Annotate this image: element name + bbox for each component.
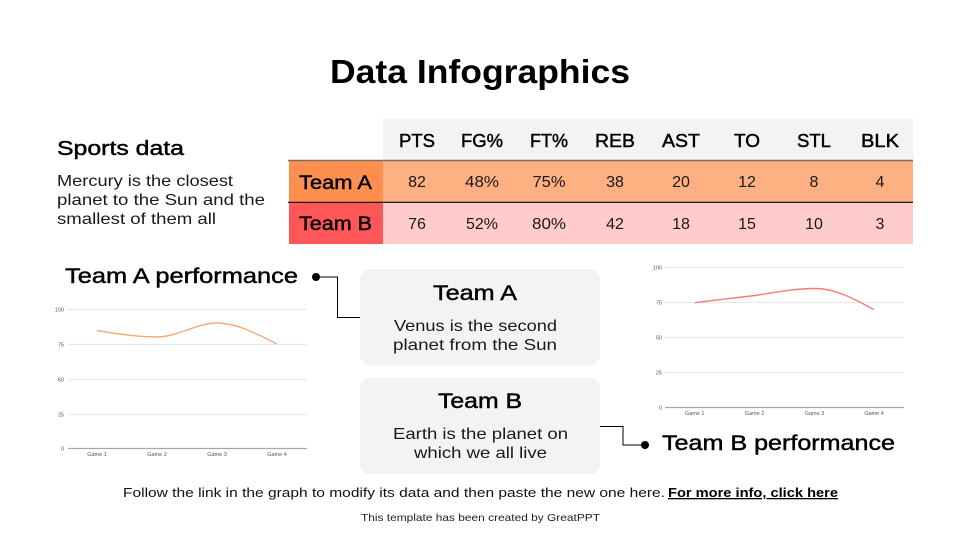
line chart: team B: 25 [656, 370, 662, 376]
line chart: team B: 75 [656, 300, 662, 306]
connector: team B [600, 426, 649, 449]
stats table: 48% [465, 174, 499, 191]
stats table: PTS [399, 131, 435, 151]
stats table: STL [797, 131, 831, 151]
text block: sports data: smallest of them all [57, 211, 216, 228]
stats table: 10 [805, 216, 823, 233]
card: team B [360, 378, 600, 474]
stats table: 82 [408, 174, 426, 191]
card: team B: Team B [438, 390, 522, 413]
line chart: team B: 0 [659, 406, 662, 412]
stats table: Team A [299, 173, 372, 194]
stats table: 80% [532, 216, 566, 233]
card: team A: Team A [433, 282, 517, 305]
stats table: 20 [672, 174, 690, 191]
title: Data Infographics [330, 53, 630, 90]
line chart: team B: Game 4 [864, 411, 884, 417]
footer note: For more info, click here [668, 485, 838, 500]
stats table: 3 [876, 216, 885, 233]
card: team A [360, 269, 600, 365]
footer note [123, 485, 838, 500]
stats table: 8 [810, 174, 819, 191]
text block: sports data: Mercury is the closest [57, 173, 234, 190]
card: team B: Earth is the planet on [393, 426, 568, 443]
stats table: FT% [530, 131, 568, 151]
card: team A: Venus is the second [394, 318, 557, 335]
line chart: team A: 75 [58, 342, 64, 348]
line chart: team B: 50 [656, 336, 662, 342]
line chart: team A: 25 [58, 412, 64, 418]
line chart: team B: Game 1 [685, 411, 704, 417]
stats table: 12 [738, 174, 756, 191]
footer note: Follow the link in the graph to modify its data and then paste the new one here. [123, 485, 665, 500]
heading: team A performance: Team A performance [65, 265, 298, 288]
line chart: team A: 100 [55, 308, 64, 314]
stats table: TO [734, 131, 760, 151]
stats table: 52% [466, 216, 498, 233]
heading: team B performance: Team B performance [662, 432, 895, 455]
stats table: 42 [606, 216, 624, 233]
credit: This template has been created by GreatPPT [361, 512, 601, 524]
line chart: team B: 100 [653, 266, 662, 272]
stats table: 76 [408, 216, 426, 233]
stats table: BLK [861, 131, 899, 151]
stats table: AST [662, 131, 700, 151]
line chart: team A: 0 [61, 446, 64, 452]
stats table [288, 119, 913, 244]
card: team B: which we all live [413, 445, 547, 462]
stats table: 4 [876, 174, 885, 191]
line chart: team A: Game 4 [267, 452, 287, 458]
line chart: team A: Game 2 [147, 452, 167, 458]
connector: team A [312, 273, 360, 318]
stats table: 15 [738, 216, 756, 233]
card: team A: planet from the Sun [393, 337, 557, 354]
stats table: REB [595, 131, 635, 151]
line chart: team A: Game 3 [207, 452, 227, 458]
stats table: 75% [532, 174, 566, 191]
stats table: Team B [299, 214, 372, 235]
line chart: team B [653, 266, 904, 417]
text block: sports data: planet to the Sun and the [57, 192, 265, 209]
line chart: team A: Game 1 [87, 452, 107, 458]
text block: sports data [57, 138, 265, 228]
stats table: 18 [672, 216, 690, 233]
line chart: team B: Game 3 [805, 411, 824, 417]
stats table: 38 [606, 174, 624, 191]
text block: sports data: Sports data [57, 138, 185, 160]
stats table: FG% [461, 131, 503, 151]
line chart: team B: Game 2 [745, 411, 764, 417]
line chart: team A [55, 308, 307, 458]
line chart: team A: 50 [58, 378, 64, 384]
